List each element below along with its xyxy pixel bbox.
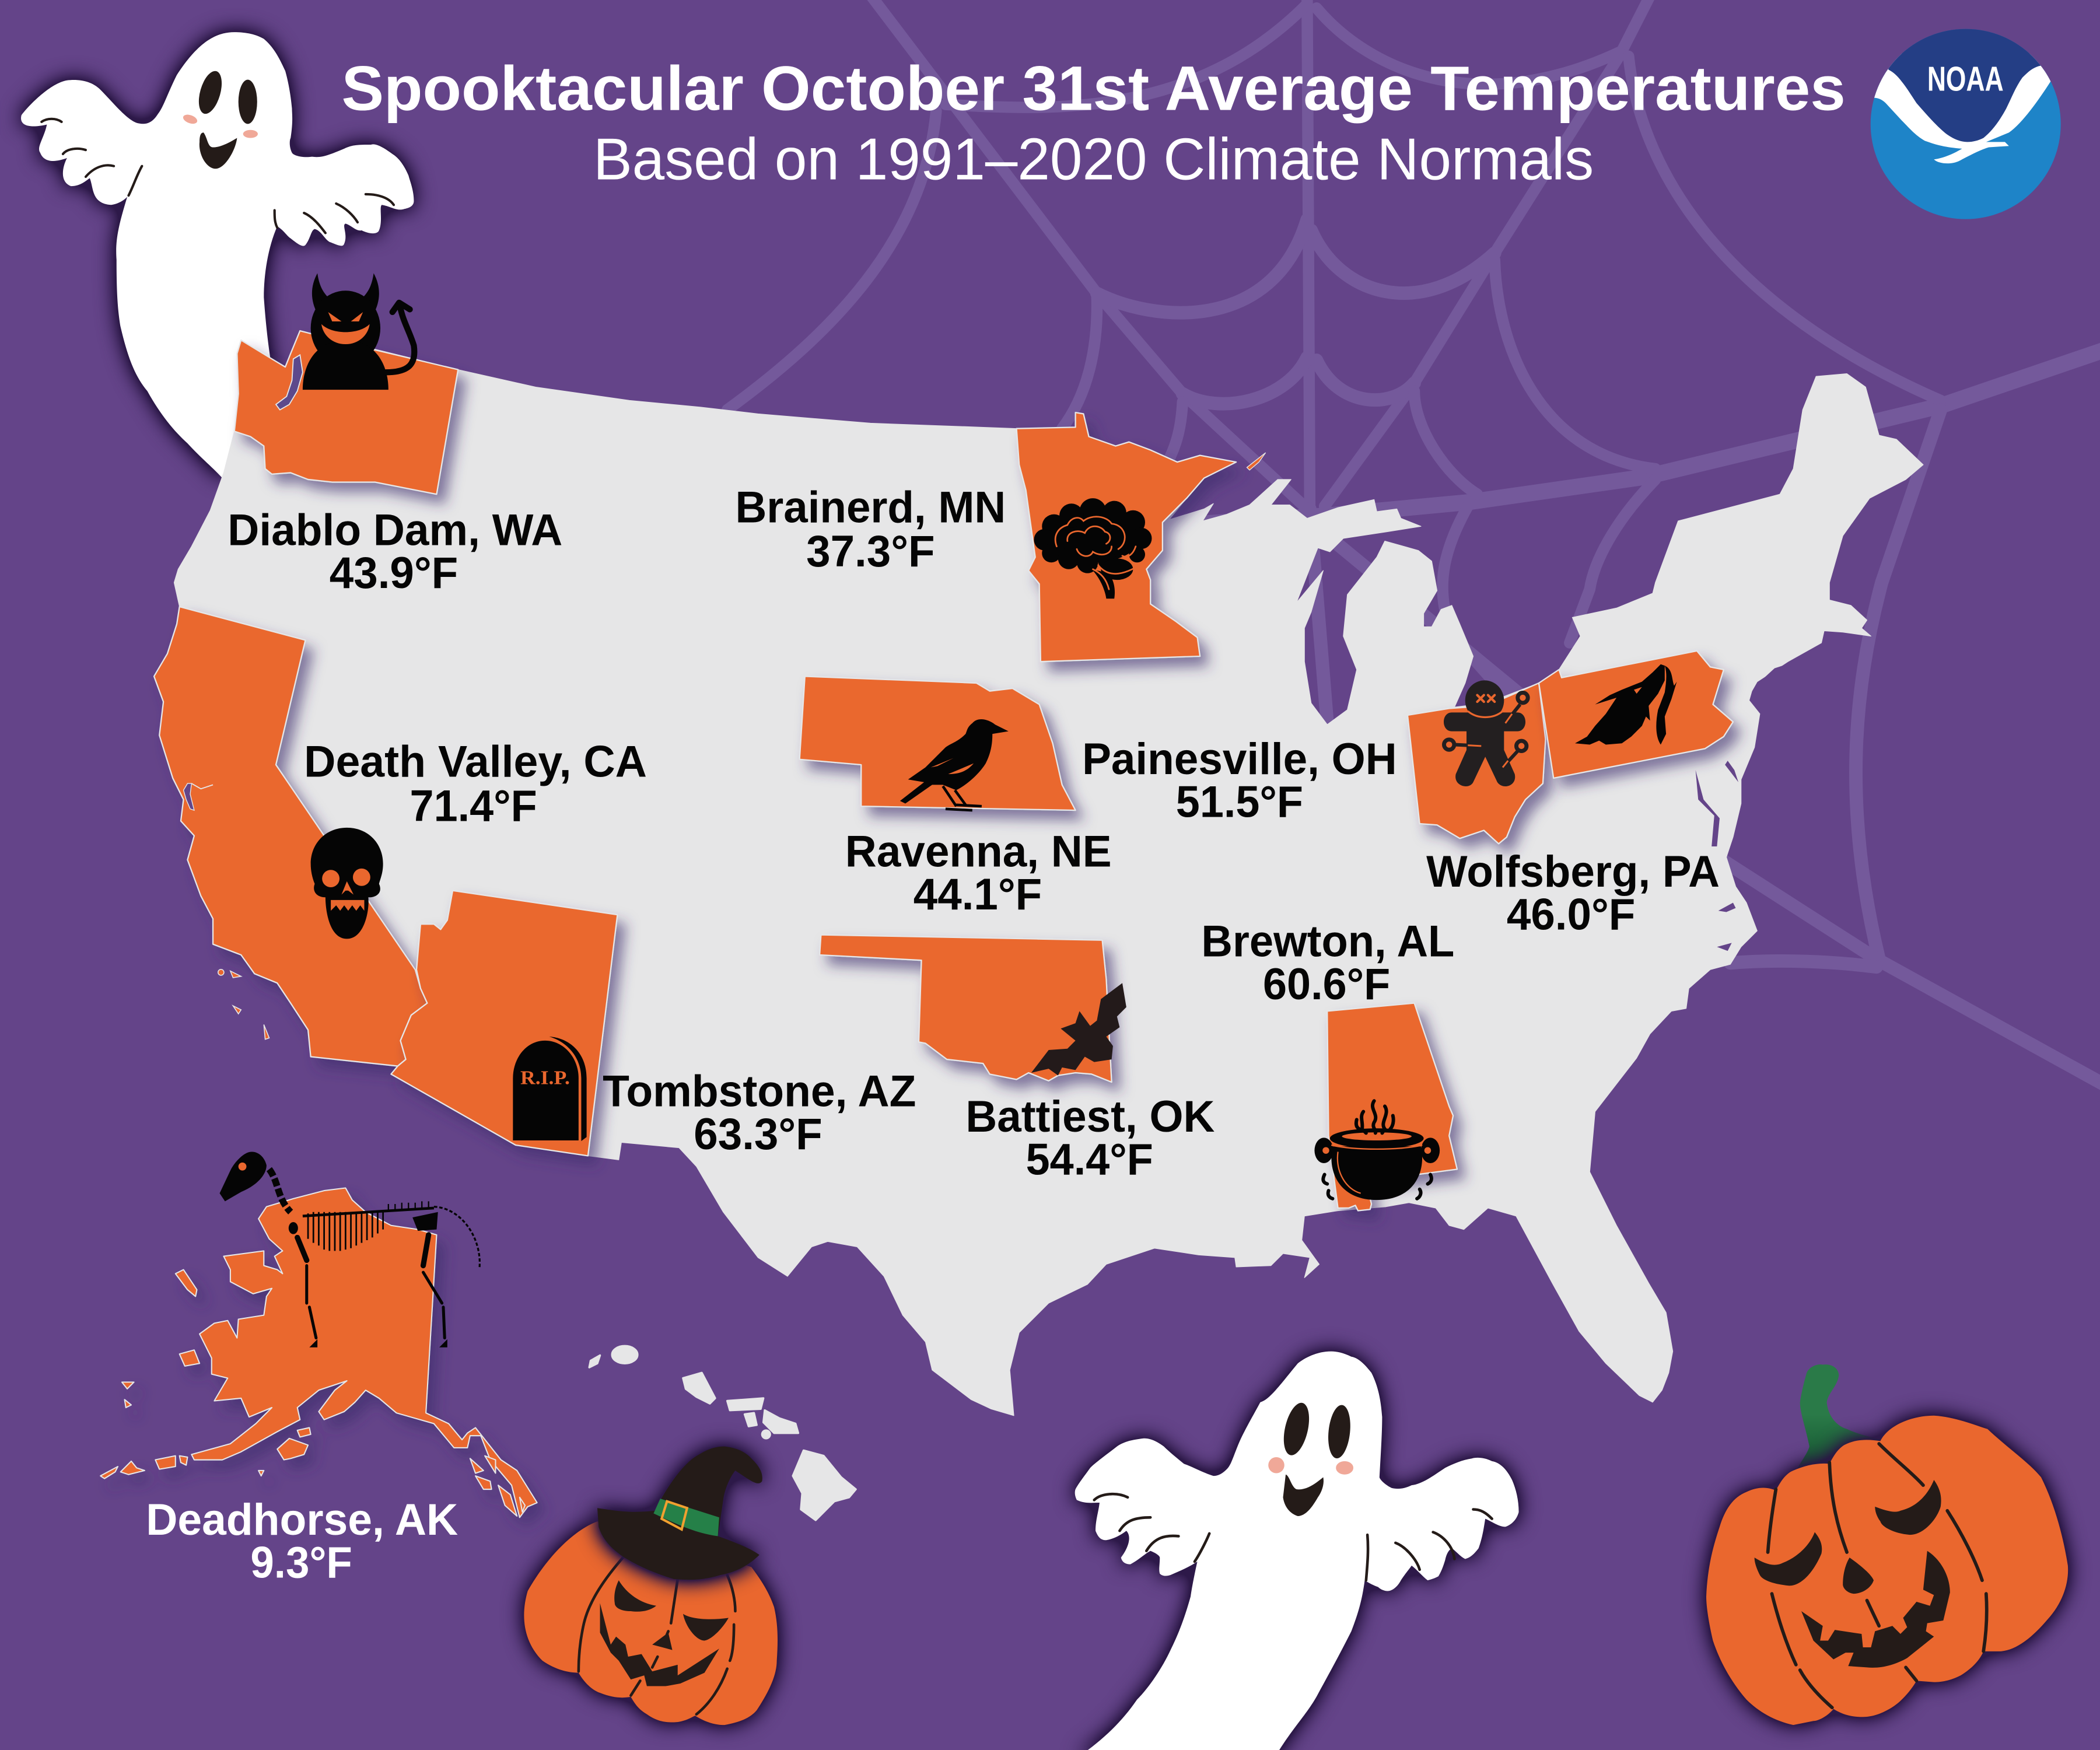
label: Deadhorse: Deadhorse, AK (146, 1495, 458, 1545)
label: Wolfsberg: 46.0°F (1507, 890, 1635, 939)
icon: raven (900, 719, 1009, 810)
ghost top left (21, 32, 414, 480)
icon: wolf (1575, 664, 1676, 745)
ghost bottom (1075, 1352, 1519, 1750)
coastal bays (1696, 660, 1798, 951)
NOAA logo (1868, 20, 2063, 219)
pumpkin seams (579, 1556, 735, 1714)
pumpkin body (1706, 1416, 2068, 1725)
state: Nebraska (800, 676, 1076, 810)
label: Ravenna: Ravenna, NE (845, 827, 1112, 876)
witch hat (597, 1447, 762, 1580)
icon: voodoo doll (1444, 680, 1528, 786)
map of contiguous US (154, 331, 1923, 1416)
pumpkin right (1706, 1364, 2068, 1725)
label: Diablo Dam: Diablo Dam, WA (228, 505, 562, 555)
label: Diablo Dam (228, 505, 562, 598)
label: Painesville: 51.5°F (1176, 778, 1303, 827)
logo sky (1888, 20, 2041, 142)
channel islands (218, 970, 269, 1040)
label: Deadhorse: 9.3°F (250, 1538, 352, 1588)
hat buckle (662, 1502, 687, 1530)
state: Ohio (1408, 683, 1545, 844)
NOAA logo: NOAA (1927, 59, 2004, 98)
Hawaii (589, 1346, 856, 1520)
label: Brainerd: Brainerd, MN (735, 482, 1006, 532)
ghost face (194, 68, 257, 169)
state: Oklahoma (820, 935, 1112, 1082)
ghost body (1075, 1352, 1519, 1750)
alaska mainland (191, 1188, 537, 1517)
hat band (653, 1499, 719, 1536)
subtitle: Based on 1991–2020 Climate Normals (593, 127, 1594, 192)
label: Wolfsberg: Wolfsberg, PA (1426, 847, 1720, 897)
state: Arizona (391, 891, 617, 1156)
label: Death Valley: 71.4°F (410, 781, 537, 831)
label: Deadhorse (146, 1495, 458, 1588)
label: Ravenna: 44.1°F (914, 870, 1042, 919)
label: Battiest: 54.4°F (1026, 1135, 1153, 1185)
label: Tombstone: 63.3°F (694, 1110, 822, 1159)
icon: cauldron (1314, 1101, 1440, 1200)
label: Battiest (965, 1092, 1214, 1185)
label: Tombstone (603, 1066, 916, 1159)
logo bird (1868, 54, 2063, 163)
ghost body (21, 32, 414, 480)
pumpkin face (600, 1580, 729, 1686)
label: Brainerd: 37.3°F (806, 527, 935, 576)
icon: skull (311, 828, 383, 939)
state: Alaska (100, 1188, 537, 1517)
icon: tombstone (513, 1037, 587, 1141)
state: Washington (235, 331, 458, 494)
label: Death Valley: Death Valley, CA (304, 737, 647, 787)
label: Brewton: 60.6°F (1263, 960, 1390, 1009)
title: Spooktacular October 31st Average Temperatures (341, 52, 1846, 123)
state: California (154, 607, 427, 1066)
icon: tombstone: R.I.P. (520, 1068, 570, 1089)
pumpkin with witch hat (524, 1447, 778, 1725)
label: Diablo Dam: 43.9°F (330, 548, 458, 598)
icon: devil (303, 273, 414, 390)
pumpkin seams (1768, 1444, 1987, 1707)
label: Wolfsberg (1426, 847, 1720, 939)
icon: brain (1034, 498, 1152, 598)
stem (1793, 1364, 1880, 1476)
state: Alabama (1327, 1003, 1457, 1211)
label: Painesville: Painesville, OH (1082, 734, 1397, 784)
label: Brewton (1201, 916, 1454, 1009)
pumpkin face (1755, 1480, 1950, 1668)
alaska islands (100, 1270, 525, 1516)
state: Minnesota (1017, 412, 1236, 662)
label: Death Valley (304, 737, 647, 831)
label: Tombstone: Tombstone, AZ (603, 1066, 916, 1116)
state: Pennsylvania (1539, 651, 1733, 778)
ghost face (1279, 1401, 1353, 1516)
icon: horse skeleton (220, 1152, 480, 1348)
label: Brewton: Brewton, AL (1201, 916, 1454, 966)
isle royale (1247, 453, 1266, 470)
label: Battiest: Battiest, OK (965, 1092, 1214, 1142)
icon: bat (1031, 983, 1126, 1076)
label: Brainerd (735, 482, 1006, 576)
spider web (727, 0, 2100, 1087)
pumpkin body (524, 1521, 778, 1725)
label: Ravenna (845, 827, 1112, 919)
label: Painesville (1082, 734, 1397, 827)
